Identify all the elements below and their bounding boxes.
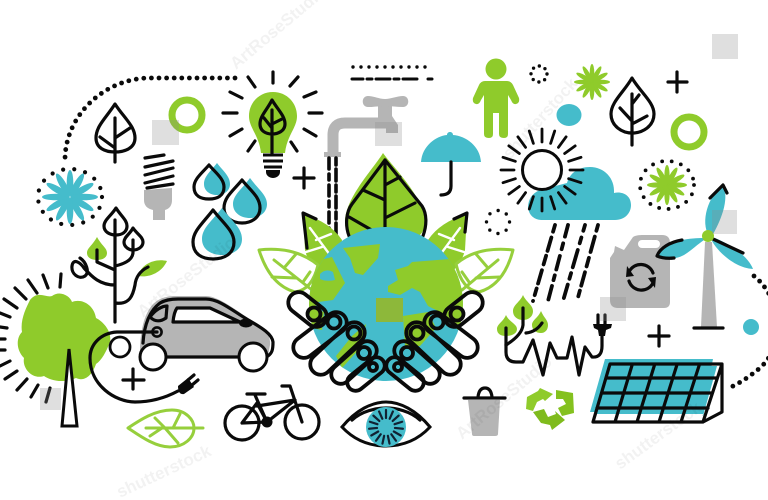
icon: trash bin	[464, 388, 505, 436]
icon: plus under car	[123, 369, 144, 389]
icon: water drops	[193, 163, 267, 259]
icon: person	[473, 58, 519, 138]
continent: north	[343, 244, 380, 275]
watermark square on globe	[376, 298, 403, 322]
icon: electric car	[140, 296, 273, 371]
icon: green flower in dotted ring	[640, 161, 694, 209]
icon: green ring left	[172, 100, 202, 130]
icon: dotted ring top right	[531, 66, 547, 82]
icon: plus near bulb	[294, 168, 314, 188]
icon: wind turbine	[657, 185, 753, 328]
icon: small dotted ring centre	[486, 210, 510, 234]
watermark text: ArtRoseStudio	[134, 233, 239, 321]
water stream dashes	[329, 158, 336, 296]
watermark text: ArtRoseStudio	[452, 352, 556, 443]
icon: teal dot top	[556, 104, 582, 126]
globe	[309, 227, 463, 381]
watermark text	[114, 0, 705, 500]
icon: plant with pulse wire and plug	[497, 295, 612, 375]
left hand	[284, 288, 388, 394]
icon: umbrella	[421, 132, 481, 195]
icon: cloud	[528, 167, 631, 220]
icon: sun	[501, 129, 583, 211]
watermark text: shutterstock	[114, 441, 215, 500]
icon: water tap	[324, 96, 408, 157]
right hand	[383, 288, 487, 394]
icon: green ring right	[674, 117, 704, 147]
icon: right outline leaf beside globe	[456, 249, 513, 292]
icon: teal flower in dotted ring	[38, 169, 102, 225]
icon: plus top right	[668, 72, 687, 92]
icon: solar panel	[590, 359, 722, 422]
icon: rain dashes	[533, 225, 598, 301]
watermark text: shutterstock	[611, 398, 705, 473]
icon: recycle arrows	[526, 388, 574, 430]
icon: outline leaf top left	[96, 104, 135, 162]
icon: right side leaf	[428, 213, 467, 282]
icon: compact fluorescent bulb	[144, 155, 173, 220]
icon: left side leaf	[303, 213, 342, 282]
continent: eurasia	[388, 259, 470, 330]
icon: large leaf behind globe	[345, 153, 426, 245]
icon: teal dot right	[743, 319, 759, 335]
icon: eye	[342, 402, 430, 447]
decorative dots and dashes top	[352, 67, 434, 79]
icon: left outline leaf beside globe	[259, 249, 318, 292]
icon: green flower top	[574, 64, 610, 100]
icon: outline leaf top right	[611, 78, 654, 145]
icon: bottom outline leaf	[128, 410, 203, 447]
dotted connector: right	[729, 276, 768, 388]
dotted connector: top left	[65, 78, 235, 160]
icon: charging cable and plug	[90, 332, 198, 402]
watermark text: shutterstock	[499, 74, 582, 163]
icon: fuel jerrycan with recycle arrows	[610, 235, 670, 308]
icon: green tree with rays	[0, 274, 110, 426]
watermark squares	[40, 34, 738, 410]
icon: plus right	[649, 326, 669, 346]
icon: bicycle	[225, 386, 319, 440]
icon: light bulb with leaf	[223, 72, 322, 178]
icon: branch plant	[72, 208, 167, 322]
